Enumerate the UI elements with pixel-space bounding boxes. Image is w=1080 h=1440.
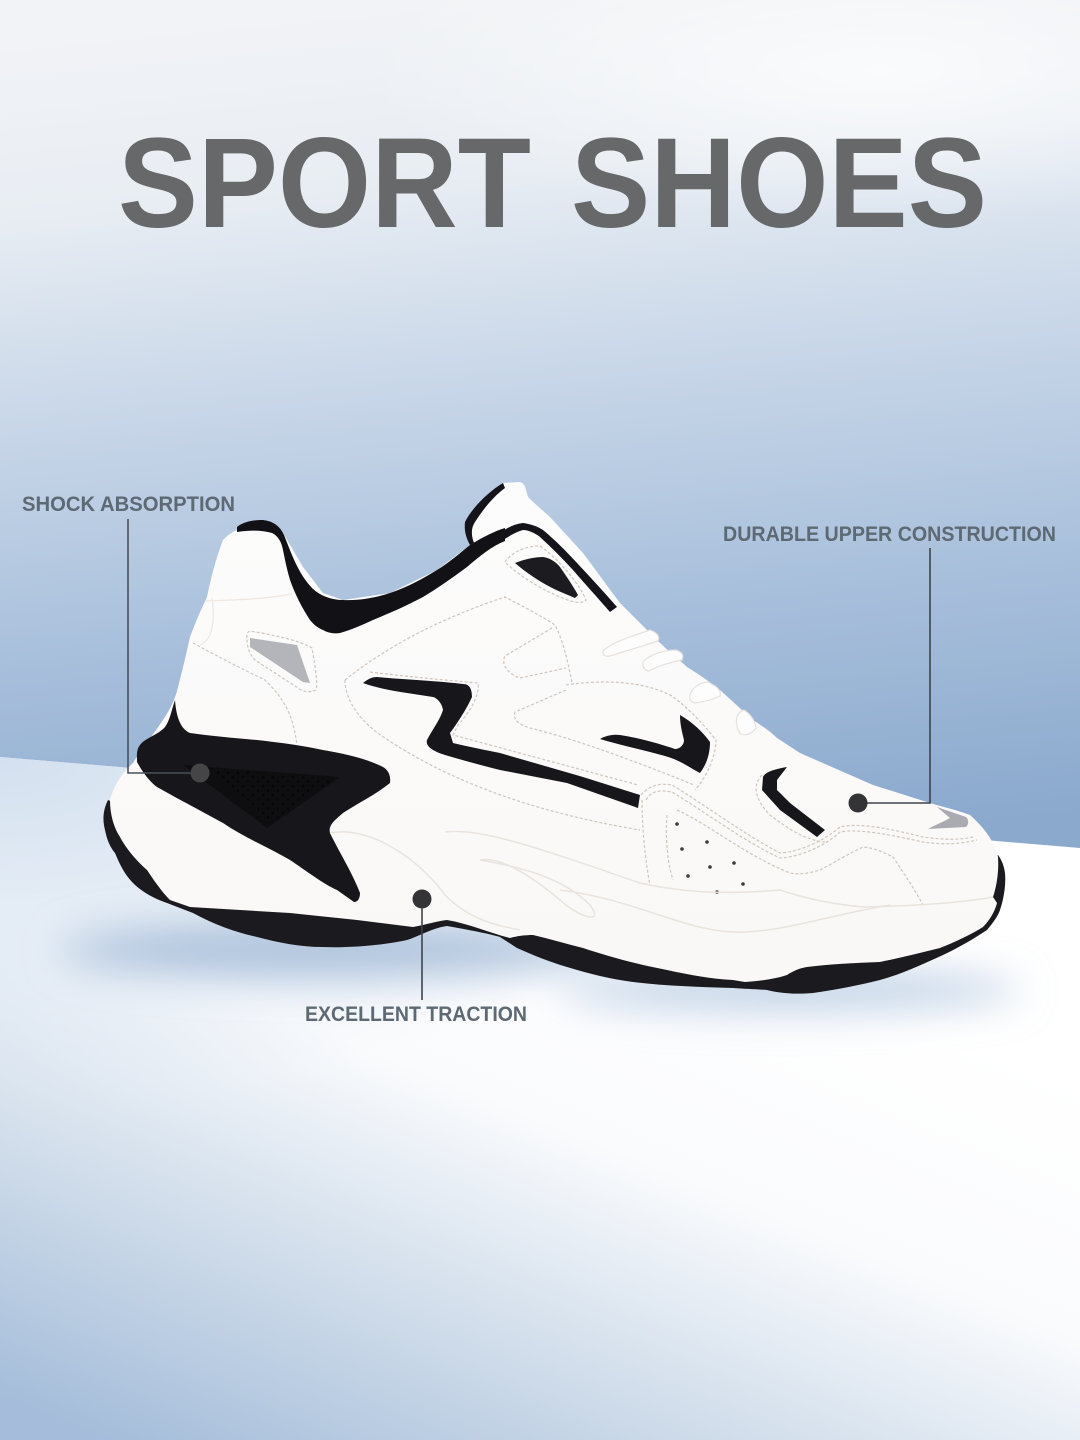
callout: durable upper construction: DURABLE UPPER CONSTRUCTION [723,523,1056,546]
collar lining [237,520,505,633]
sport shoe illustration [103,482,1005,994]
heel reflective window [250,638,310,683]
callout: excellent traction [305,890,527,1026]
tongue edge [465,483,505,545]
heel mesh [183,765,340,828]
zigzag overlay [363,677,640,808]
toe reflective [928,807,968,829]
upper and midsole [110,482,998,982]
callout: excellent traction: EXCELLENT TRACTION [305,1003,527,1026]
title [118,112,987,255]
heel stabiliser [137,700,390,902]
callout: durable upper construction [723,523,1056,812]
title: SPORT [118,112,531,255]
toe overlay black [762,767,825,837]
toe perforations [675,822,745,894]
shoe shadow [60,922,1020,1010]
laces [603,630,756,735]
stitching [193,546,977,905]
outsole [103,800,1005,994]
midsole sculpting [330,831,993,932]
title: SHOES [571,112,987,255]
callout: shock absorption [22,493,235,782]
forefoot swoosh [600,715,710,773]
background: wall gradient [0,0,1080,860]
callout: shock absorption: SHOCK ABSORPTION [22,493,235,516]
background: floor [0,757,1080,1440]
eyestay black trim [500,523,617,612]
lace window [515,557,578,598]
